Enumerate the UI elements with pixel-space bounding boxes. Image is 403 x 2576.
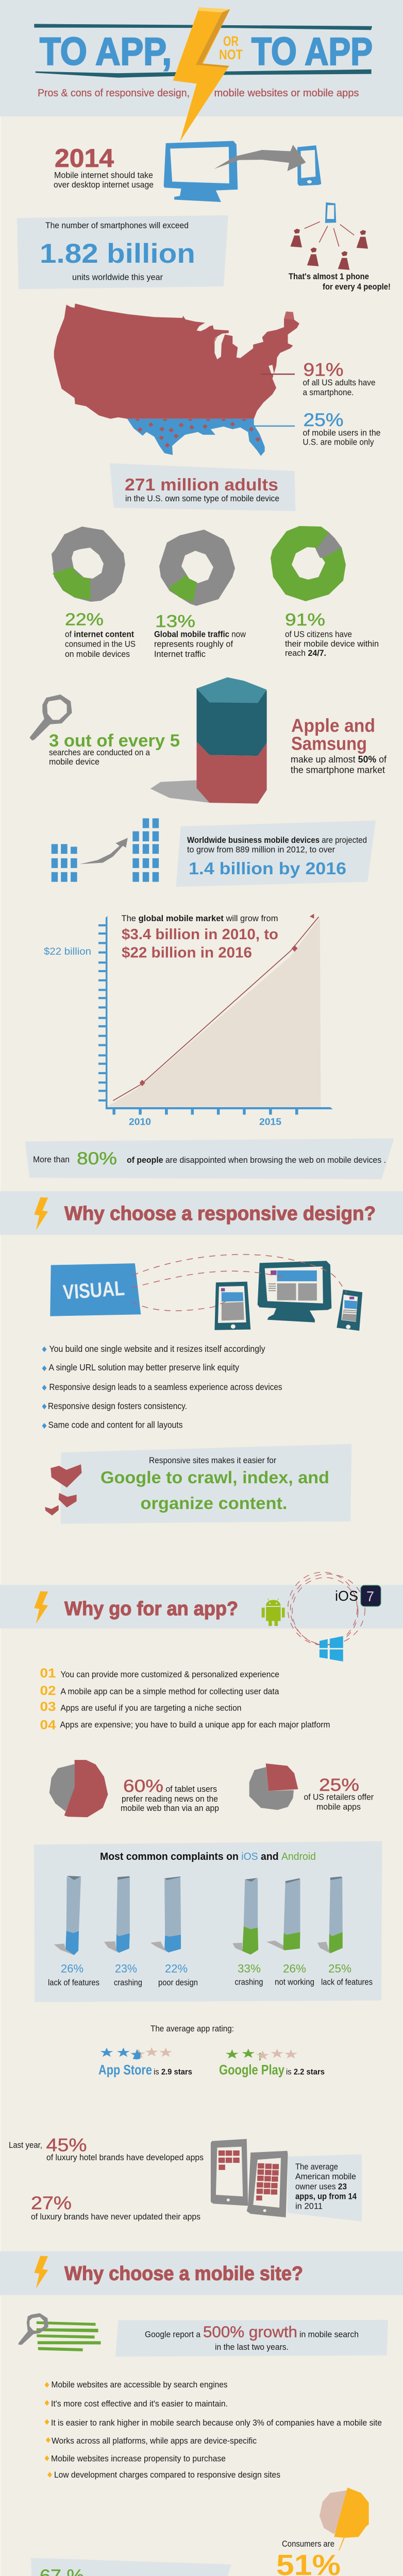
panel text: The average	[295, 2162, 338, 2172]
arrow: growth	[80, 838, 128, 864]
section heading: responsive design	[0, 1191, 403, 1235]
stat: 2014 mobile overtakes desktop	[54, 141, 321, 202]
list: responsive design benefits	[42, 1344, 282, 1430]
panel: projected growth: to grow from 889 million in 2012, to over	[187, 844, 335, 854]
stat: 27% luxury brands: 27%	[31, 2193, 72, 2213]
icon: smartphone	[297, 145, 321, 186]
illustration: responsive devices	[50, 1255, 362, 1331]
stat: 25% mobile only: of mobile users in the	[303, 428, 380, 438]
title: to app right: TO APP	[251, 30, 373, 73]
list: reasons for an app	[40, 1666, 330, 1732]
icon: large lightning bolt	[173, 7, 230, 142]
bar: iOS poor design: poor design	[158, 1978, 198, 1988]
panel: average American apps	[211, 2139, 362, 2222]
caption	[289, 272, 391, 292]
connecting lines	[305, 222, 354, 247]
subtitle right: mobile websites or mobile apps	[214, 88, 359, 99]
icon: search results with magnifier	[19, 2313, 100, 2351]
icon: device grid growth	[52, 818, 159, 882]
axis label: 2015: 2015	[259, 1116, 281, 1127]
icon: tablet	[214, 1282, 250, 1330]
header background	[0, 0, 403, 116]
description: their mobile device within	[285, 639, 379, 649]
icon: desktop monitor	[164, 141, 238, 202]
list: mobile site benefits: Mobile websites increase propensity to purchase	[51, 2454, 226, 2464]
description: represents roughly of	[154, 639, 233, 649]
donut stat: 13% mobile traffic	[154, 530, 246, 659]
list: responsive design benefits: You build one single website and it resizes itself accordingly	[49, 1344, 265, 1354]
bar: Android not working: 26%	[283, 1962, 306, 1975]
panel: growth callout: in mobile search	[299, 2330, 359, 2340]
map: United States smartphone ownership	[54, 303, 381, 456]
description: consumed in the US	[65, 639, 136, 649]
stat: 27% luxury brands: of luxury brands have never updated their apps	[31, 2212, 200, 2222]
list: responsive design benefits: Responsive design leads to a seamless experience across devices	[49, 1382, 282, 1392]
stat: Apple and Samsung: Samsung	[291, 733, 367, 754]
caption: for every 4 people!	[323, 282, 391, 292]
stat: 91% have smartphone: a smartphone.	[303, 387, 354, 397]
map: blue portion	[127, 419, 265, 456]
icon: magnifying glass	[29, 694, 72, 741]
stat: 3 out of every 5 searches: mobile device	[49, 757, 99, 767]
big year: 2014	[55, 144, 114, 173]
panel: 80% of people disappointed: of people are disappointed when browsing the web on mobile devices .	[127, 1155, 386, 1165]
dashed connector curves	[131, 1255, 347, 1311]
donut chart	[271, 526, 346, 601]
axes and ticks	[98, 916, 333, 1115]
label: App Store: App Store	[98, 2062, 152, 2078]
panel: 271 million adults: 271 million adults	[125, 475, 278, 494]
pie chart	[320, 2487, 369, 2551]
panel text: owner uses 23	[295, 2181, 347, 2191]
description	[154, 629, 246, 659]
pie stat: 25% of retailers	[249, 1764, 374, 1811]
pie stat: 25% of retailers: 25%	[319, 1775, 359, 1795]
bar: Android lack of features: lack of features	[321, 1977, 373, 1987]
stat: 45% luxury hotel brands: of luxury hotel brands have developed apps	[46, 2153, 204, 2162]
icon group: one phone for four people	[289, 202, 391, 292]
arrow: desktop to mobile	[214, 145, 306, 171]
icon: desktop monitor	[258, 1261, 331, 1323]
stat: 27% luxury brands	[31, 2193, 200, 2222]
panel: growth callout: in the last two years.	[215, 2342, 289, 2352]
value: 22%	[65, 610, 104, 629]
icon: tablet with few apps	[211, 2139, 248, 2206]
donut stat: 91% device within reach	[271, 526, 379, 658]
item 01: You can provide more customized & personalized experience	[61, 1669, 279, 1680]
panel: visual	[50, 1263, 141, 1316]
panel: Google crawl callout	[45, 1444, 351, 1524]
axis label: $22 billion: $22 billion	[44, 946, 91, 957]
panel: projected growth: 1.4 billion by 2016	[189, 859, 346, 878]
chart caption	[122, 913, 278, 961]
section heading: why go for an app	[0, 1585, 403, 1629]
stat: 45% luxury hotel brands	[9, 2136, 204, 2162]
description: Global mobile traffic now	[154, 629, 246, 639]
donut stat: 22% internet content	[52, 527, 136, 659]
panel: projected growth: Worldwide business mobile devices are projected	[187, 835, 367, 845]
description: Internet traffic	[154, 649, 206, 659]
bar: Android crashing: crashing	[235, 1977, 263, 1987]
average app rating: The average app rating:	[150, 2024, 234, 2033]
panel: Google crawl callout: Responsive sites makes it easier for	[149, 1455, 276, 1465]
panel: 80% of people disappointed: 80%	[77, 1149, 117, 1168]
value: App Store: is 2.9 stars	[154, 2068, 192, 2077]
description: over desktop internet usage	[54, 180, 154, 190]
chart: smartphone market cylinder	[150, 677, 387, 804]
list: mobile site benefits	[44, 2380, 382, 2480]
stat: Apple and Samsung: the smartphone market	[291, 765, 385, 775]
icon: tablet with many apps	[247, 2151, 288, 2217]
value: 91%	[285, 610, 325, 629]
donut chart	[52, 527, 125, 602]
section heading: why choose a mobile site	[0, 2251, 403, 2295]
label: Google Play: Google Play	[219, 2062, 284, 2078]
pie chart	[249, 1764, 298, 1810]
description: of internet content	[65, 629, 134, 639]
bullet markers	[44, 2382, 52, 2478]
caption: That's almost 1 phone	[289, 272, 369, 281]
panel: growth callout: Google report a	[145, 2330, 200, 2340]
panel: 271 million adults: in the U.S. own some type of mobile device	[125, 494, 279, 503]
panel text: American mobile	[295, 2172, 356, 2181]
stat: 500% growth in mobile search	[19, 2313, 388, 2357]
icon: hearts	[45, 1464, 82, 1515]
dashed orbit rings	[288, 1572, 365, 1645]
panel: 1.82 billion smartphones: units worldwide this year	[72, 273, 163, 282]
stat: 3 out of every 5 searches: searches are conducted on a	[49, 748, 150, 757]
stat: 51% of consumers: Consumers are	[282, 2539, 334, 2549]
illustration: mobile platforms	[262, 1572, 381, 1662]
panel: 1.82 billion smartphones: The number of smartphones will exceed	[45, 221, 189, 230]
icon: phone	[337, 1290, 362, 1331]
callout line: 91%	[261, 374, 295, 375]
description	[54, 171, 154, 190]
value: 13%	[155, 612, 195, 631]
stat: 25% mobile only: U.S. are mobile only	[303, 437, 374, 447]
stat: 25% mobile only	[303, 410, 380, 447]
icon: bolt	[34, 1591, 48, 1624]
pie stat: 60% tablet users: 60%	[123, 1776, 163, 1796]
callout line: 25%	[255, 426, 295, 427]
stat: 45% luxury hotel brands: Last year,	[9, 2140, 42, 2150]
stat: 3 out of every 5 searches: 3 out of every 5	[49, 731, 180, 751]
list: mobile site benefits: It's more cost effective and it's easier to maintain.	[51, 2399, 228, 2409]
heading text: Why go for an app?	[64, 1598, 238, 1620]
panel: 80% of people disappointed: More than	[33, 1155, 70, 1164]
pie stat: 25% of retailers: of US retailers offer	[304, 1792, 374, 1802]
panel: Google crawl callout: Google to crawl, index, and	[100, 1468, 329, 1487]
bar: Android not working: not working	[275, 1977, 314, 1987]
list: responsive design benefits: Same code and content for all layouts	[48, 1420, 183, 1430]
list: mobile site benefits: It is easier to rank higher in mobile search because only 3% of companies have a mobile site	[51, 2418, 382, 2428]
panel: 1.82 billion smartphones	[17, 215, 228, 289]
panel: visual: VISUAL	[62, 1277, 125, 1304]
bar: iOS lack of features: lack of features	[48, 1978, 99, 1988]
icon: iOS 7: iOS	[335, 1588, 358, 1604]
panel: Google crawl callout: organize content.	[140, 1494, 288, 1513]
pie stat: 60% tablet users: prefer reading news on the	[122, 1794, 218, 1804]
list: mobile site benefits: Mobile websites are accessible by search engines	[52, 2380, 228, 2389]
icon: android	[262, 1598, 285, 1626]
item 03	[40, 1700, 241, 1714]
icon: windows	[320, 1636, 343, 1662]
bar: Android crashing: 33%	[238, 1962, 261, 1975]
stat: 3 out of every 5 searches	[29, 694, 180, 767]
bar: iOS lack of features	[48, 1876, 99, 1988]
stars: Google Play	[226, 2048, 297, 2061]
item 01: 01	[40, 1666, 56, 1681]
stat: 91% have smartphone	[303, 360, 375, 397]
stat: Apple and Samsung	[291, 715, 387, 775]
list: responsive design benefits: A single URL solution may better preserve link equity	[48, 1362, 239, 1372]
panel text: in 2011	[295, 2201, 323, 2211]
bar: Android lack of features	[317, 1876, 373, 1987]
growth line	[113, 914, 318, 1100]
stars: App Store	[100, 2047, 172, 2059]
stat: 91% have smartphone: 91%	[303, 360, 343, 380]
item 02: 02	[40, 1684, 56, 1698]
big number: 1.82 billion	[40, 239, 195, 269]
item 04	[40, 1718, 330, 1732]
average app rating	[98, 2024, 325, 2078]
item 03: 03	[40, 1700, 56, 1714]
icon: bolt	[34, 2256, 48, 2289]
description: on mobile devices	[65, 649, 130, 659]
stat: worldwide business mobile devices	[52, 818, 376, 887]
description	[285, 629, 379, 658]
stat: 91% have smartphone: of all US adults have	[303, 378, 375, 387]
heading text: Why choose a responsive design?	[64, 1203, 376, 1225]
panel: projected growth	[176, 821, 376, 887]
icon: iOS 7: 7	[366, 1588, 374, 1604]
description: reach 24/7.	[285, 648, 326, 658]
list: mobile site benefits: Works across all platforms, while apps are device-specific	[52, 2436, 257, 2446]
icon: bolt	[34, 1197, 48, 1230]
heading text: Why choose a mobile site?	[64, 2263, 303, 2284]
bar: iOS crashing: crashing	[114, 1978, 142, 1988]
item 04: 04	[40, 1718, 56, 1732]
panel: growth callout: 500% growth	[203, 2323, 297, 2341]
stat: 45% luxury hotel brands: 45%	[46, 2136, 87, 2156]
stat: Apple and Samsung: Apple and	[291, 715, 375, 736]
pie stat: 60% tablet users	[49, 1760, 219, 1817]
donut chart	[159, 530, 235, 606]
panel: 80% of people disappointed	[25, 1139, 394, 1179]
area under the line	[107, 918, 321, 1107]
pie stat: 60% tablet users: of tablet users	[166, 1784, 217, 1794]
item 03: Apps are useful if you are targeting a niche section	[61, 1703, 241, 1713]
description	[65, 629, 136, 659]
title: or: OR	[223, 33, 239, 49]
value: Google Play: is 2.2 stars	[286, 2068, 325, 2077]
panel: 67% mobile-friendly	[31, 2558, 231, 2576]
chart caption: $22 billion in 2016	[122, 945, 252, 961]
stat: Apple and Samsung: make up almost 50% of	[291, 754, 387, 765]
list: responsive design benefits: Responsive design fosters consistency.	[48, 1401, 187, 1411]
stat: 25% mobile only: 25%	[303, 410, 343, 430]
bar: iOS poor design: 22%	[165, 1962, 188, 1975]
item 04: Apps are expensive; you have to build a unique app for each major platform	[60, 1720, 330, 1730]
item 02	[40, 1684, 279, 1698]
icon: iOS 7	[335, 1585, 381, 1606]
pie stat: 60% tablet users: mobile web than via an app	[121, 1803, 219, 1813]
icon: shared phone	[325, 202, 336, 223]
chart caption: $3.4 billion in 2010, to	[122, 926, 278, 943]
map: red portion	[54, 303, 299, 419]
bar: iOS crashing	[104, 1876, 142, 1988]
bar: iOS poor design	[150, 1876, 198, 1988]
bar: Android not working	[266, 1878, 314, 1987]
chart: global mobile market growth	[44, 913, 333, 1127]
bar: iOS crashing: 23%	[115, 1962, 137, 1975]
title: not: NOT	[219, 47, 243, 62]
header	[0, 0, 403, 116]
pie chart	[49, 1760, 108, 1817]
stat: 51% of consumers	[233, 2487, 384, 2576]
bar: Android lack of features: 25%	[328, 1962, 351, 1975]
chart caption: The global mobile market will grow from	[122, 913, 278, 923]
item 02: A mobile app can be a simple method for collecting user data	[61, 1687, 279, 1697]
panel heading: Most common complaints on iOS and Android	[100, 1851, 316, 1862]
list: mobile site benefits: Low development charges compared to responsive design sites	[54, 2470, 280, 2480]
panel text	[295, 2162, 357, 2211]
description: Mobile internet should take	[54, 171, 153, 180]
title ribbons	[34, 24, 372, 78]
axis label: 2010: 2010	[129, 1116, 151, 1127]
description: of US citizens have	[285, 629, 352, 639]
panel text: apps, up from 14	[295, 2192, 357, 2201]
subtitle left: Pros & cons of responsive design,	[38, 88, 190, 99]
panel: growth callout	[115, 2320, 388, 2357]
title: to app: TO APP,	[40, 30, 172, 73]
bullet markers	[42, 1347, 46, 1429]
bar: Android crashing	[232, 1878, 263, 1987]
icon: people	[291, 229, 368, 270]
panel: 271 million adults	[110, 463, 296, 511]
bar: iOS lack of features: 26%	[61, 1962, 83, 1975]
panel: most common complaints	[34, 1841, 382, 2002]
pie stat: 25% of retailers: mobile apps	[316, 1802, 361, 1811]
item 01	[40, 1666, 279, 1681]
